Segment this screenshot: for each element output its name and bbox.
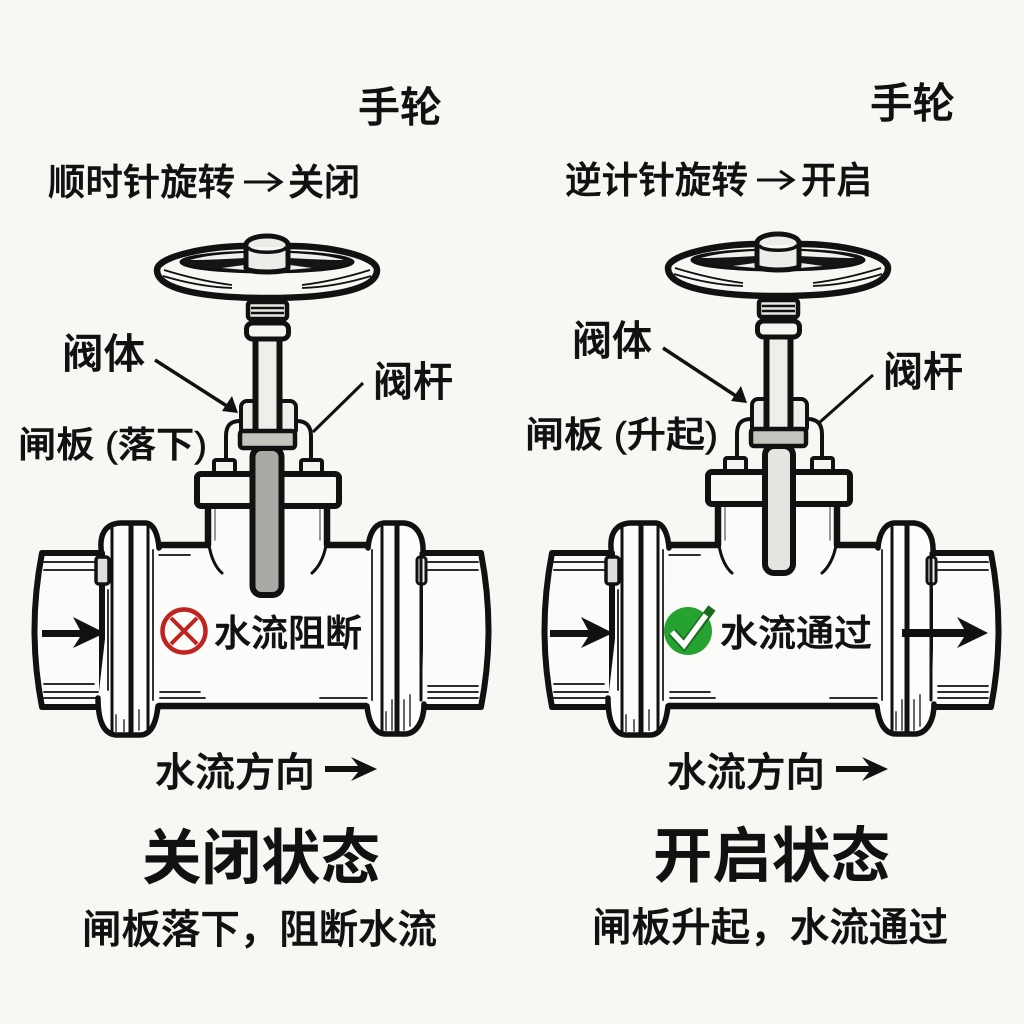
- label: valve stem open: 阀杆: [883, 349, 963, 395]
- label: gate lowered: 闸板 (落下): [18, 424, 207, 465]
- handwheel and stem: closed: [157, 236, 377, 448]
- pipe body: closed: [34, 505, 488, 735]
- arrow: inlet flow open: [550, 617, 613, 648]
- arrow: inlet flow closed: [42, 617, 105, 648]
- leader line: valve stem closed: [313, 383, 363, 432]
- gate plate lowered: [252, 448, 282, 595]
- icon: blocked cross: [162, 610, 206, 652]
- label: flow passing: 水流通过: [720, 613, 872, 654]
- leader line: valve stem open: [820, 375, 873, 422]
- label: counterclockwise to open: 开启: [801, 160, 872, 201]
- arrow: outlet flow open: [902, 617, 988, 648]
- valve bonnet: closed: [197, 421, 339, 506]
- label: valve body open: 阀体: [572, 318, 652, 364]
- title: closed state: 关闭状态: [142, 825, 380, 892]
- label: handwheel open: 手轮: [870, 80, 955, 127]
- label: gate raised: 闸板 (升起): [525, 414, 718, 455]
- pipe body: open: [544, 505, 998, 735]
- label: flow direction closed: 水流方向: [155, 751, 315, 795]
- valve bonnet: open: [708, 419, 850, 504]
- label: flow blocked: 水流阻断: [214, 613, 362, 654]
- label: clockwise to close: [48, 162, 360, 203]
- panel: closed state valve: [34, 236, 488, 735]
- label: clockwise to close: 关闭: [288, 162, 360, 203]
- label: valve stem closed: 阀杆: [373, 359, 453, 405]
- panel: open state valve: [544, 234, 998, 735]
- label: flow direction open: 水流方向: [667, 751, 825, 795]
- label: valve body closed: 阀体: [62, 331, 145, 377]
- arrow: valve body pointer closed: [155, 360, 238, 413]
- label: counterclockwise to open: 逆计针旋转: [565, 160, 748, 201]
- subtitle: open state: 闸板升起，水流通过: [592, 906, 948, 950]
- label: clockwise to close: 顺时针旋转: [48, 162, 235, 203]
- icon: passing check: [664, 607, 712, 655]
- gate plate raised: [765, 446, 793, 573]
- arrow: valve body pointer open: [663, 348, 747, 403]
- label: counterclockwise to open: [565, 160, 872, 201]
- label: handwheel closed: 手轮: [358, 84, 442, 131]
- handwheel and stem: open: [668, 234, 888, 446]
- title: open state: 开启状态: [653, 823, 890, 890]
- subtitle: closed state: 闸板落下，阻断水流: [82, 908, 437, 952]
